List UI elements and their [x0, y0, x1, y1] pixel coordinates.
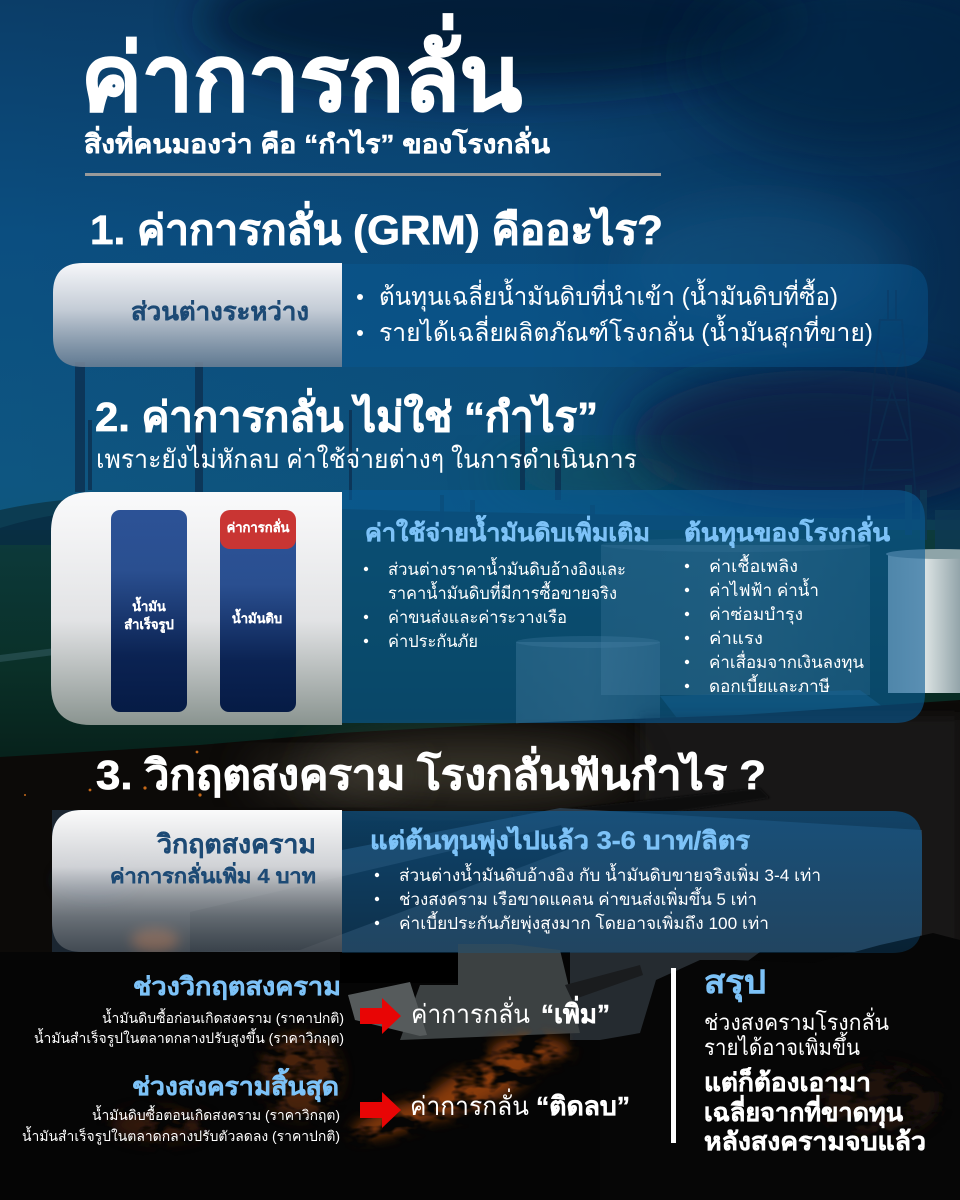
summary: แต่ก็ต้องเอามา	[704, 1067, 871, 1097]
background: refinery sky and storage tanks	[0, 0, 960, 780]
bar: refined product	[111, 510, 187, 712]
column: refinery costs: ค่าแรง	[709, 629, 763, 648]
column: refinery costs	[684, 515, 891, 696]
definition bullets: รายได้เฉลี่ยผลิตภัณฑ์โรงกลั่น (น้ำมันสุกที่ขาย)	[379, 314, 873, 348]
cost surge text: แต่ต้นทุนพุ่งไปแล้ว 3-6 บาท/ลิตร	[370, 825, 751, 857]
result: margin negative	[410, 1088, 630, 1121]
column: extra crude costs: ส่วนต่างราคาน้ำมันดิบอ้างอิงและ	[388, 557, 626, 579]
panel label box	[52, 810, 342, 952]
panel label: ส่วนต่างระหว่าง	[131, 298, 309, 326]
column: refinery costs: ค่าเชื้อเพลิง	[709, 554, 798, 576]
panel: margin and costs	[51, 490, 925, 725]
bar: crude oil with margin	[220, 510, 296, 712]
column: extra crude costs: ค่าขนส่งและค่าระวางเรือ	[388, 608, 567, 627]
definition bullets	[357, 278, 873, 348]
bar: crude oil with margin: น้ำมันดิบ	[232, 608, 282, 626]
panel: war crisis	[52, 810, 922, 953]
scene behind panel 3	[342, 808, 922, 953]
panel label: วิกฤตสงคราม	[157, 829, 316, 859]
during war block: น้ำมันสำเร็จรูปในตลาดกลางปรับสูงขึ้น (ราคาวิกฤต)	[34, 1028, 344, 1047]
arrow: during war	[360, 998, 401, 1034]
summary: สรุป	[704, 964, 766, 1003]
cost surge text: ช่วงสงคราม เรือขาดแคลน ค่าขนส่งเพิ่มขึ้น 5 เท่า	[399, 887, 757, 909]
bar: crude oil with margin: ค่าการกลั่น	[227, 518, 290, 535]
heading: section 3: 3. วิกฤตสงคราม โรงกลั่นฟันกำไร ?	[96, 746, 766, 798]
panel body blue	[342, 264, 928, 367]
result: margin increases	[411, 995, 610, 1029]
column: extra crude costs: ค่าใช้จ่ายน้ำมันดิบเพิ่มเติม	[365, 514, 650, 547]
during war block: น้ำมันดิบซื้อก่อนเกิดสงคราม (ราคาปกติ)	[102, 1008, 344, 1026]
heading: section 2: 2. ค่าการกลั่น ไม่ใช่ “กำไร”	[95, 388, 598, 440]
during war block	[34, 973, 344, 1047]
panel body blue	[342, 490, 925, 723]
panel body blue	[342, 811, 922, 953]
cost surge text: ส่วนต่างน้ำมันดิบอ้างอิง กับ น้ำมันดิบขายจริงเพิ่ม 3-4 เท่า	[399, 863, 821, 885]
post war block: น้ำมันดิบซื้อตอนเกิดสงคราม (ราคาวิกฤต)	[92, 1105, 340, 1123]
result: margin negative: “ติดลบ”	[536, 1091, 630, 1121]
result: margin increases: “เพิ่ม”	[541, 995, 610, 1029]
section 2 subheading: เพราะยังไม่หักลบ ค่าใช้จ่ายต่างๆ ในการดำเนินการ	[96, 444, 637, 474]
heading: section 1: 1. ค่าการกลั่น (GRM) คืออะไร?	[90, 201, 663, 253]
background: war scene with tank and fire	[0, 700, 960, 1200]
summary	[704, 964, 926, 1156]
column: refinery costs: ค่าไฟฟ้า ค่าน้ำ	[709, 578, 819, 600]
bar: refined product: น้ำมัน	[132, 596, 166, 614]
panel: definition of GRM	[53, 263, 928, 367]
post war block: น้ำมันสำเร็จรูปในตลาดกลางปรับตัวลดลง (ราคาปกติ)	[22, 1126, 340, 1145]
definition bullets: ต้นทุนเฉลี่ยน้ำมันดิบที่นำเข้า (น้ำมันดิบที่ซื้อ)	[379, 278, 838, 312]
panel label	[110, 829, 316, 888]
column: extra crude costs: ค่าประกันภัย	[388, 632, 478, 651]
result: margin negative: ค่าการกลั่น	[410, 1088, 529, 1121]
summary: รายได้อาจเพิ่มขึ้น	[704, 1032, 860, 1060]
column: extra crude costs: ราคาน้ำมันดิบที่มีการซื้อขายจริง	[388, 581, 617, 603]
summary: ช่วงสงครามโรงกลั่น	[704, 1007, 889, 1035]
bar: refined product: สำเร็จรูป	[124, 615, 174, 633]
subtitle: สิ่งที่คนมองว่า คือ “กำไร” ของโรงกลั่น	[84, 125, 550, 159]
arrow: post war	[360, 1092, 401, 1128]
summary: หลังสงครามจบแล้ว	[704, 1128, 926, 1156]
result: margin increases: ค่าการกลั่น	[411, 996, 530, 1029]
panel label: ค่าการกลั่นเพิ่ม 4 บาท	[110, 861, 316, 888]
post war block: ช่วงสงครามสิ้นสุด	[132, 1067, 339, 1103]
title: ค่าการกลั่น	[81, 13, 522, 130]
summary: เฉลี่ยจากที่ขาดทุน	[704, 1095, 903, 1129]
column: extra crude costs	[364, 514, 650, 651]
cost surge text: ค่าเบี้ยประกันภัยพุ่งสูงมาก โดยอาจเพิ่มถึง 100 เท่า	[399, 911, 769, 934]
panel label box	[53, 263, 342, 367]
during war block: ช่วงวิกฤตสงคราม	[133, 973, 341, 1001]
title	[81, 13, 550, 159]
column: refinery costs: ค่าซ่อมบำรุง	[709, 605, 803, 625]
column: refinery costs: ดอกเบี้ยและภาษี	[709, 674, 830, 696]
panel chart box	[51, 492, 342, 725]
post war block	[22, 1067, 340, 1145]
cost surge text	[370, 825, 821, 934]
column: refinery costs: ต้นทุนของโรงกลั่น	[684, 515, 891, 549]
column: refinery costs: ค่าเสื่อมจากเงินลงทุน	[709, 650, 864, 673]
